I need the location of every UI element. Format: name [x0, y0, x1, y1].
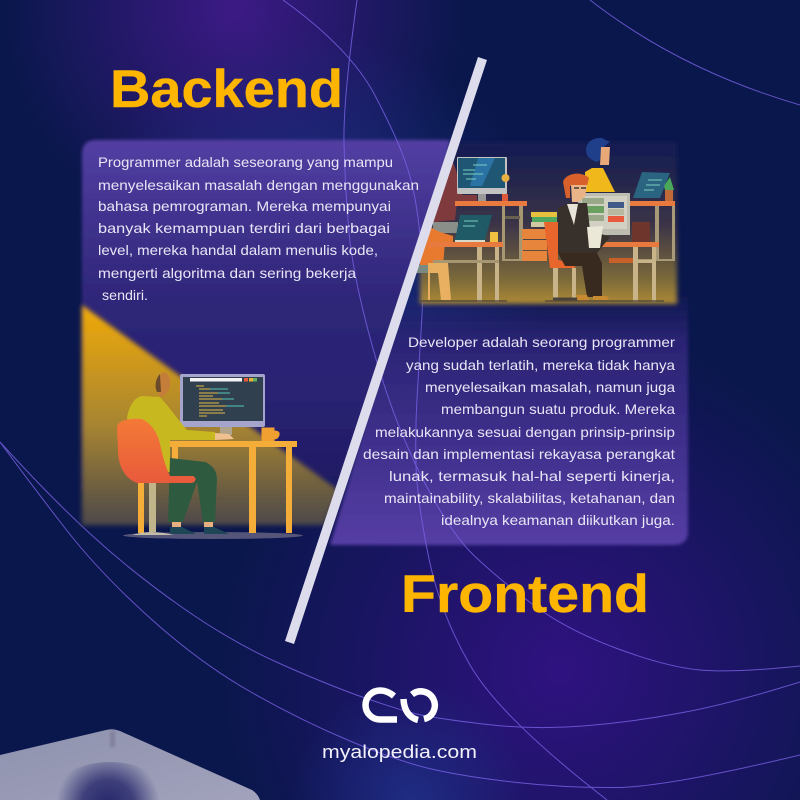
seated person: [558, 203, 610, 253]
text block: frontend description: desain dan implementasi rekayasa perangkat: [363, 446, 675, 462]
left back person: [434, 162, 477, 222]
panel: backend text background: [82, 140, 450, 490]
decorative corner shape: [0, 729, 260, 800]
standing person: [586, 138, 610, 162]
panel: frontend text background: [330, 290, 688, 545]
lower-left desk: [433, 247, 499, 302]
text block: backend description: [98, 154, 419, 303]
desk: [170, 441, 297, 533]
title: Frontend: Frontend: [401, 565, 649, 624]
person: [127, 396, 215, 472]
text block: backend description: level, mereka handal dalam menulis kode,: [98, 242, 378, 258]
right back desk: [638, 206, 675, 261]
drawers and books: [522, 229, 547, 239]
diagonal divider: [285, 57, 487, 644]
text block: frontend description: menyelesaikan masalah, namun juga: [425, 379, 675, 395]
mug: [262, 428, 279, 441]
office background: [420, 142, 677, 304]
laptop: [455, 215, 492, 240]
illustration: backend beam of light: [82, 305, 338, 525]
text block: backend description: menyelesaikan masalah dengan menggunakan: [98, 177, 419, 193]
illustration: office developers: [415, 138, 677, 304]
chair: [544, 222, 575, 268]
text block: backend description: sendiri.: [102, 287, 148, 303]
text block: frontend description: [363, 334, 675, 528]
text block: backend description: mengerti algoritma dan sering bekerja: [98, 265, 356, 281]
chair: [138, 482, 144, 533]
text block: frontend description: lunak, termasuk hal-hal seperti kinerja,: [389, 468, 675, 484]
floor shadow: [123, 532, 303, 539]
website label: myalopedia.com: [322, 741, 477, 762]
monitor center: [578, 193, 630, 235]
lower-left person: [420, 227, 453, 267]
logo: [366, 690, 435, 720]
monitor left: [457, 157, 507, 194]
text block: frontend description: membangun suatu produk. Mereka: [441, 401, 675, 417]
text block: frontend description: Developer adalah seorang programmer: [408, 334, 675, 350]
text block: backend description: banyak kemampuan terdiri dari berbagai: [98, 220, 390, 236]
text block: frontend description: idealnya keamanan diikutkan juga.: [441, 512, 675, 528]
center desk: [633, 247, 656, 302]
text block: backend description: bahasa pemrograman. Mereka mempunyai: [98, 198, 391, 214]
text block: frontend description: melakukannya sesuai dengan prinsip-prinsip: [375, 424, 675, 440]
illustration: backend developer: [117, 372, 303, 539]
text block: frontend description: yang sudah terlatih, mereka tidak hanya: [406, 357, 675, 373]
laptop right: [633, 172, 670, 198]
upper desk: [502, 206, 523, 261]
text block: frontend description: maintainability, skalabilitas, ketahanan, dan: [384, 490, 675, 506]
monitor: [180, 374, 265, 435]
title: Backend: Backend: [110, 60, 343, 119]
text block: backend description: Programmer adalah seseorang yang mampu: [98, 154, 393, 170]
